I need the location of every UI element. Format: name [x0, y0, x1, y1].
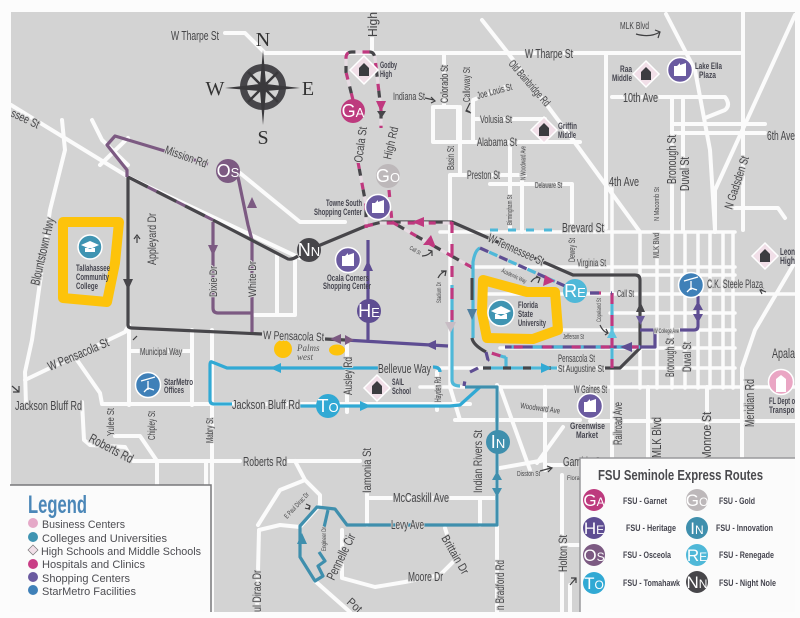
legend items [28, 518, 201, 598]
route: Innovation [300, 387, 497, 581]
street labels: Disston St [517, 471, 540, 478]
direction arrows [123, 101, 703, 544]
icon: Godby High school [350, 56, 397, 84]
icon: Greenwise Market [570, 394, 605, 440]
street labels: Roberts Rd [87, 430, 136, 466]
route key: IN [690, 519, 704, 538]
highlight: Palms West marks: Palms [296, 343, 320, 353]
route key [583, 489, 776, 594]
highlight: Palms West marks: west [297, 352, 314, 362]
street labels: Pot [344, 595, 366, 616]
legend items: Colleges and Universities [42, 533, 167, 545]
route key: FSU - Gold [719, 496, 755, 507]
route key: GA [583, 491, 605, 510]
route badges on map: IN [491, 432, 505, 452]
street labels: Colorado St [439, 65, 451, 103]
street labels: Delaware St [535, 181, 562, 190]
route key: HE [584, 519, 604, 538]
legend items: High Schools and Middle Schools [41, 546, 201, 558]
icon: StarMetro Offices [136, 372, 193, 398]
icon: Ocala Corners Shopping Center [323, 248, 371, 291]
legend title: Legend [28, 491, 87, 519]
street labels: Old Bainbridge Rd [506, 58, 552, 109]
route key: FSU - Heritage [626, 523, 676, 534]
street labels: Birmingham St [507, 195, 514, 225]
icon: SAIL School [364, 375, 411, 401]
route badges on map: OS [217, 161, 240, 181]
icon: Godby High school: Godby [380, 60, 397, 70]
street labels: S Monroe St [699, 412, 714, 470]
street labels: Floral [567, 476, 581, 482]
street labels: n Bradford Rd [493, 560, 507, 610]
street labels: W Tennessee St [486, 231, 547, 268]
street labels: Jefferson St [563, 334, 584, 341]
street labels: MLK Blvd [649, 417, 664, 458]
street labels: Chipley St [147, 411, 158, 440]
street labels: W Gaines St [574, 384, 607, 396]
street labels: Dewey St [567, 238, 577, 262]
route badges on map: TO [317, 396, 339, 416]
street labels: Blountstown Hwy [27, 216, 58, 287]
street labels: N Gadsden St [722, 154, 752, 211]
street labels: Call St [408, 246, 422, 257]
street labels: N Macomb St [654, 187, 661, 221]
route key: FSU - Garnet [623, 496, 668, 507]
route key: FSU - Renegade [719, 550, 774, 561]
icon: Towne South Shopping Center: Shopping Center [314, 207, 362, 217]
icon: Griffin Middle school: Griffin [558, 121, 577, 131]
street labels: Bronough St [663, 338, 677, 377]
route key: RE [687, 546, 707, 565]
street labels: Jackson Bluff Rd [232, 397, 300, 412]
street labels: High [365, 12, 380, 37]
street labels: Municipal Way [140, 347, 182, 358]
route key: FSU - Night Nole [719, 578, 776, 589]
icon: C.K. Steele Plaza [678, 272, 763, 298]
route: Tomahawk [210, 362, 480, 406]
street labels: Holton St [556, 535, 570, 572]
panel: FSU Seminole Express Routes [580, 458, 795, 612]
route badges on map: NN [298, 240, 320, 260]
route: Osceola [107, 136, 252, 335]
street labels: Alabama St [477, 135, 517, 149]
street labels: ul Dirac Dr [250, 570, 264, 612]
street labels: Bronough St [664, 135, 679, 184]
brevard dashed route [490, 228, 552, 232]
icon: Florida State University: State [518, 309, 533, 320]
street labels: N Woodward Ave [520, 146, 528, 180]
street labels: Levy Ave [391, 517, 424, 532]
icon: Florida State University: Florida [518, 300, 538, 311]
street labels: W Tharpe St [525, 46, 573, 61]
route key: NN [687, 573, 707, 592]
street labels: Moore Dr [408, 569, 443, 584]
street labels: Meridian Rd [742, 379, 757, 427]
icon: Tallahassee Community College: Community [76, 272, 109, 282]
icon: Raa Middle school: Middle [612, 73, 632, 83]
icon: Tallahassee Community College [76, 235, 110, 291]
icon: Raa Middle school: Raa [620, 64, 633, 74]
icon: C.K. Steele Plaza: C.K. Steele Plaza [707, 277, 763, 291]
icon: Ocala Corners Shopping Center: Shopping Center [323, 281, 371, 291]
icon: StarMetro Offices: StarMetro [164, 377, 193, 387]
street labels: Volusia St [480, 114, 512, 126]
icon: Leon High school [752, 243, 795, 269]
street labels: W College Ave [654, 328, 679, 335]
icon: Godby High school: High [380, 69, 392, 79]
compass rose: N [256, 29, 270, 51]
icon: Florida State University: University [518, 318, 546, 329]
street labels: E Paul Dirac Dr [283, 491, 311, 520]
street labels: 10th Ave [623, 90, 658, 105]
street labels: Ausley Rd [341, 357, 355, 395]
icon: Lake Ella Plaza shopping: Lake Ella [695, 61, 723, 71]
route badges on map: GA [342, 101, 365, 121]
street labels: Pensacola St [558, 353, 595, 365]
panel: legend [10, 485, 211, 612]
street labels: Virginia St [577, 258, 606, 269]
icon: Tallahassee Community College: College [76, 281, 98, 291]
route key: FSU - Innovation [716, 523, 773, 534]
street labels: Call St [617, 289, 634, 300]
street labels: Yulee St [106, 408, 117, 436]
icon: Lake Ella Plaza shopping: Plaza [699, 70, 717, 80]
street labels: Duval St [677, 157, 692, 191]
street labels: High Rd [380, 125, 401, 161]
route key: FSU - Tomahawk [623, 578, 681, 589]
compass rose: W [206, 78, 225, 100]
icon: FL Dept of Transportation [768, 370, 798, 415]
compass rose: S [257, 127, 269, 149]
street labels: Copeland St [597, 298, 603, 322]
street labels: Engineer Dr [322, 527, 328, 551]
street labels: Calloway St [462, 67, 473, 102]
street labels: Pennelle Cir [323, 530, 359, 582]
icon: SAIL School: School [392, 386, 411, 396]
street labels: Stadium Dr [437, 282, 443, 303]
street labels: Preston St [467, 168, 500, 182]
street labels: W Tharpe St [171, 28, 219, 43]
street labels: Brevard St [562, 220, 604, 235]
street labels: ssee St [9, 106, 42, 132]
street labels: W Pensacola St [263, 328, 325, 344]
street labels: Bellevue Way [378, 361, 431, 376]
street labels: St Augustine St [558, 364, 604, 375]
street labels: Dixie Dr [208, 266, 220, 297]
route: Garnet and Gold shared dashes [346, 52, 473, 268]
legend items: Business Centers [42, 519, 125, 531]
icon: Ocala Corners Shopping Center: Ocala Corners [327, 273, 369, 283]
street labels: W Pensacola St [45, 334, 111, 374]
route key: OS [583, 546, 605, 565]
icon: Greenwise Market: Greenwise [570, 421, 605, 431]
route key: GO [686, 491, 708, 510]
street labels: Woodward Ave [520, 401, 561, 416]
icon: Towne South Shopping Center [314, 194, 390, 220]
street labels: White Dr [247, 261, 259, 297]
icon: Florida State University [488, 300, 546, 329]
street labels: Indian Rivers St [471, 430, 485, 493]
street labels: McCaskill Ave [393, 490, 449, 505]
icon: Towne South Shopping Center: Towne South [326, 198, 362, 208]
legend items: Shopping Centers [42, 573, 130, 585]
highlight: TCC yellow outline [63, 222, 119, 302]
icon: SAIL School: SAIL [392, 377, 404, 387]
legend items: StarMetro Facilities [42, 586, 136, 598]
street labels: Ocala St [351, 125, 370, 163]
icon: Lake Ella Plaza shopping [668, 58, 723, 82]
street labels: Basin St [446, 146, 457, 170]
route: Heritage [345, 240, 698, 347]
street labels: Mabry St [205, 418, 216, 443]
icon: Tallahassee Community College: Tallahassee [76, 263, 110, 273]
icon: Raa Middle school [612, 61, 659, 87]
legend items: Hospitals and Clinics [42, 559, 145, 571]
route: Night Nole [128, 177, 640, 368]
route badges on map: HE [358, 301, 380, 321]
route: campus loop dashes [452, 222, 640, 386]
street labels: Joe Louis St [476, 82, 514, 102]
street labels: Mission Rd [163, 143, 209, 171]
street labels: Iamonia St [360, 447, 374, 493]
street labels: Jackson Bluff Rd [15, 398, 82, 413]
street labels: Brittain Dr [438, 532, 472, 577]
street labels: MLK Blvd [652, 233, 661, 258]
street labels: Gamble St [563, 454, 603, 469]
street labels: Academic Way [500, 268, 527, 285]
route badges on map [216, 99, 587, 454]
street labels: Duval St [680, 342, 694, 372]
street labels: Roberts Rd [243, 454, 287, 469]
icon: Griffin Middle school [531, 117, 577, 143]
street labels: 4th Ave [609, 174, 639, 189]
street labels: Appleyard Dr [145, 213, 159, 265]
street labels: Indiana St [393, 91, 425, 103]
icon: Greenwise Market: Market [576, 430, 598, 440]
compass rose: E [302, 78, 314, 100]
highlight: Palms West marks [274, 340, 345, 362]
highlight: FSU yellow outline [482, 280, 558, 339]
street labels: Railroad Ave [611, 402, 625, 445]
route badges on map: RE [564, 281, 586, 301]
route key: TO [584, 574, 604, 593]
compass rose [206, 29, 314, 149]
icon: Griffin Middle school: Middle [558, 130, 576, 140]
route badges on map: GO [376, 166, 400, 186]
street labels: Hayden Rd [433, 377, 443, 402]
icon: StarMetro Offices: Offices [164, 385, 184, 395]
route: Night Nole diagonal dashes [128, 176, 206, 218]
route key: FSU - Osceola [623, 550, 672, 561]
street labels: MLK Blvd [620, 21, 649, 32]
